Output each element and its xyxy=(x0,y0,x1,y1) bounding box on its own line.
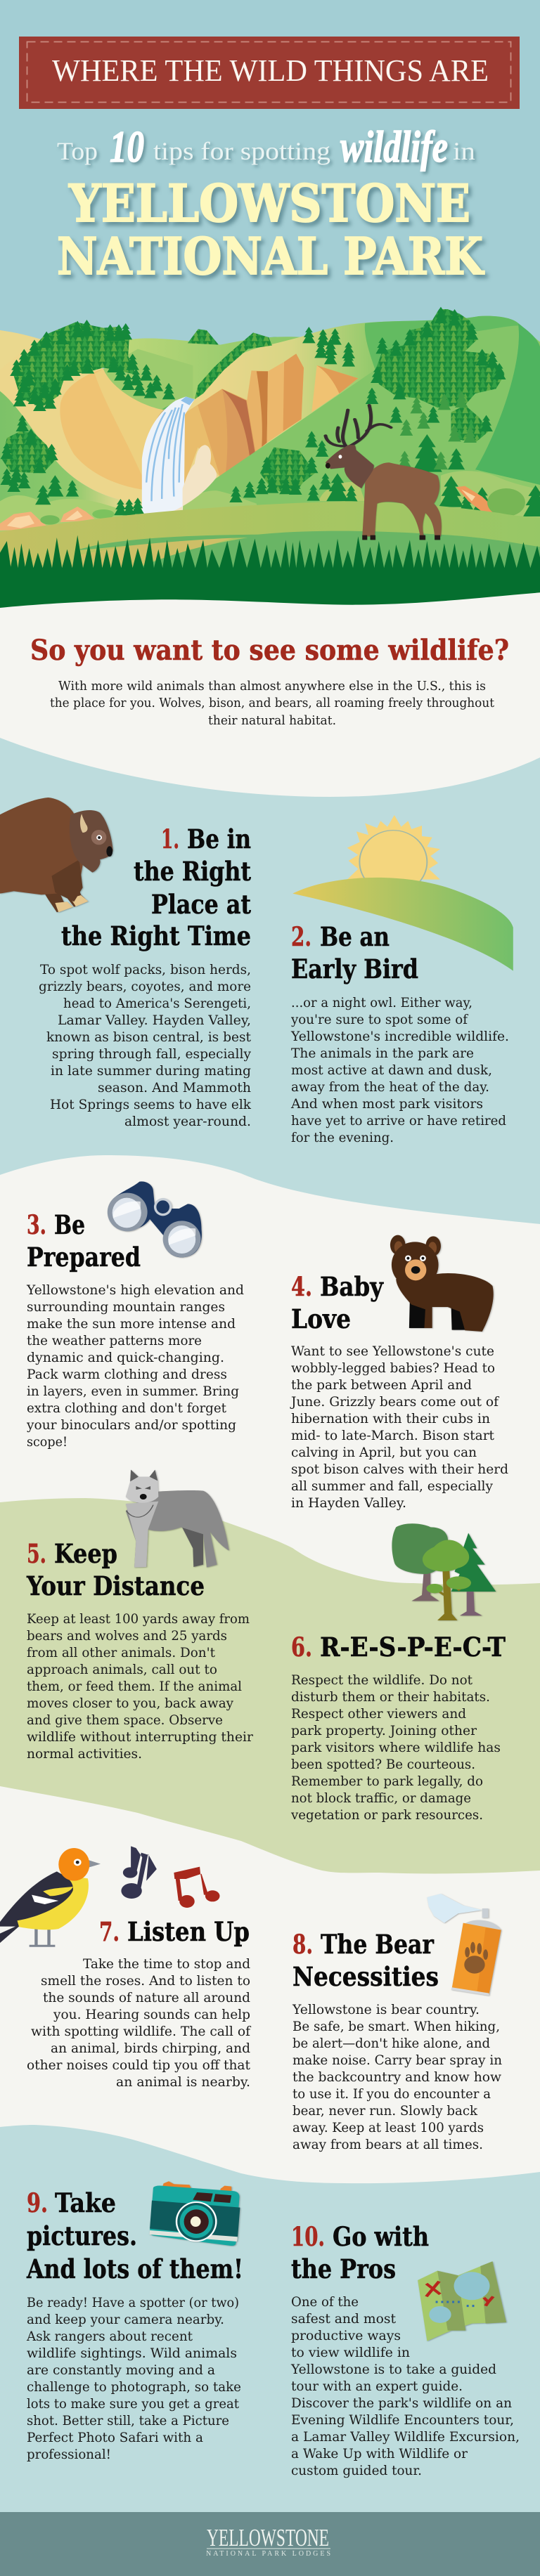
text: tip 1: To spot wolf packs, bison herds, xyxy=(40,962,251,977)
heading: tip 5: Your Distance xyxy=(26,1570,205,1601)
panel: tip 5 xyxy=(26,1470,254,1762)
text: tip 9: are constantly moving and a xyxy=(27,2362,215,2378)
text: tip 8: be alert—don't hike alone, and xyxy=(292,2036,490,2051)
text: tip 4: calving in April, but you can xyxy=(291,1445,477,1460)
heading: tip 8: Necessities xyxy=(292,1961,439,1992)
heading: tip 7: 7. xyxy=(99,1916,120,1947)
icon: bear spray xyxy=(427,1894,501,1996)
text: tip 10: a Lamar Valley Wildlife Excursion, xyxy=(291,2429,520,2445)
heading: tip 1: 1. xyxy=(161,824,179,854)
heading: tip 1: Place at xyxy=(151,889,251,920)
text: tip 3: extra clothing and don't forget xyxy=(27,1400,226,1416)
panel: tip 8 xyxy=(292,1894,502,2152)
text: tip 9: Be ready! Have a spotter (or two) xyxy=(27,2295,239,2310)
background: teal band tips 1-2 xyxy=(0,738,540,1224)
intro text: the place for you. Wolves, bison, and bears, all roaming freely throughout xyxy=(50,696,495,710)
panel: tip 3 xyxy=(26,1181,244,1450)
text: tip 10: to view wildlife in xyxy=(291,2345,410,2360)
text: tip 3: surrounding mountain ranges xyxy=(27,1299,225,1315)
heading: tip 4: 4. xyxy=(291,1271,312,1302)
heading: tip 9: pictures. xyxy=(27,2220,137,2251)
text: tip 10: Discover the park's wildlife on an xyxy=(291,2395,512,2411)
text: tip 1: in late summer during mating xyxy=(51,1063,251,1079)
icon: trees xyxy=(392,1523,496,1620)
text: tip 1: grizzly bears, coyotes, and more xyxy=(39,979,251,994)
text: tip 10: Yellowstone is to take a guided xyxy=(290,2362,496,2377)
icon: trail map xyxy=(418,2261,506,2341)
text: tip 7: with spotting wildlife. The call of xyxy=(31,2024,252,2039)
text: tip 3: scope! xyxy=(27,1434,68,1450)
ground xyxy=(0,501,540,576)
text: tip 2: for the evening. xyxy=(291,1130,394,1145)
text: tip 6: Remember to park legally, do xyxy=(291,1774,483,1789)
text: tip 5: moves closer to you, back away xyxy=(27,1696,233,1711)
heading: tip 2: Be an xyxy=(320,921,390,952)
icon: music notes xyxy=(121,1846,219,1908)
text: tip 7 xyxy=(27,1956,252,2090)
icon: wolf xyxy=(126,1470,229,1568)
text: tip 4: hibernation with their cubs in xyxy=(291,1411,490,1426)
text: tip 7: an animal is nearby. xyxy=(116,2074,250,2090)
subtitle: 10 xyxy=(110,122,144,171)
text: tip 3: in layers, even in summer. Bring xyxy=(27,1384,239,1399)
heading: tip 4: Baby xyxy=(320,1271,384,1302)
text: tip 7: smell the roses. And to listen to xyxy=(41,1973,250,1989)
footer xyxy=(0,2512,540,2576)
subtitle xyxy=(57,122,475,171)
text: tip 1: known as bison central, is best xyxy=(46,1029,251,1045)
text: tip 7: you. Hearing sounds can help xyxy=(53,2007,250,2022)
text: tip 5: them, or feed them. If the animal xyxy=(27,1679,242,1694)
text: tip 4: the park between April and xyxy=(291,1377,472,1393)
intro text: With more wild animals than almost anywhere else in the U.S., this is xyxy=(58,679,486,694)
panel: tip 2 xyxy=(290,815,513,1145)
forests xyxy=(0,307,540,516)
subtitle: tips for spotting xyxy=(153,137,330,165)
text: tip 9: Perfect Photo Safari with a xyxy=(27,2430,203,2445)
text: tip 2: most active at dawn and dusk, xyxy=(291,1062,492,1078)
text: tip 3 xyxy=(26,1282,244,1450)
text: tip 8: away. Keep at least 100 yards xyxy=(292,2120,484,2135)
text: tip 8: Yellowstone is bear country. xyxy=(292,2002,480,2017)
text: tip 7: Take the time to stop and xyxy=(83,1956,250,1972)
text: tip 5: bears and wolves and 25 yards xyxy=(27,1628,227,1644)
text: tip 5: Keep at least 100 yards away from xyxy=(27,1611,250,1627)
text: tip 10: productive ways xyxy=(291,2328,401,2343)
text: tip 2: Yellowstone's incredible wildlife. xyxy=(290,1029,509,1044)
icon: camera xyxy=(150,2181,240,2246)
heading: tip 10 xyxy=(291,2221,429,2284)
text: tip 7: the sounds of nature all around xyxy=(43,1990,250,2005)
text: tip 6: park visitors where wildlife has xyxy=(291,1740,501,1755)
heading: tip 3: 3. xyxy=(27,1209,46,1240)
text: tip 1 xyxy=(39,962,251,1129)
text: tip 10: a Wake Up with Wildlife or xyxy=(291,2446,468,2461)
text: tip 2: you're sure to spot some of xyxy=(290,1012,469,1027)
text: tip 8: bear, never run. Slowly back xyxy=(292,2103,477,2119)
text: tip 5: and give them space. Observe xyxy=(27,1712,223,1728)
heading: tip 9: And lots of them! xyxy=(26,2253,243,2284)
text: tip 8: to use it. If you do encounter a xyxy=(292,2086,491,2102)
text: tip 4: June. Grizzly bears come out of xyxy=(290,1394,500,1410)
heading: tip 4: Love xyxy=(291,1303,351,1334)
text: tip 8: make noise. Carry bear spray in xyxy=(292,2053,502,2068)
text: tip 6 xyxy=(290,1672,501,1823)
text: tip 3: dynamic and quick-changing. xyxy=(27,1350,224,1365)
footer logo: NATIONAL PARK LODGES xyxy=(206,2550,330,2558)
text: tip 9: and keep your camera nearby. xyxy=(27,2312,224,2327)
panel: tip 6 xyxy=(290,1523,506,1823)
icon: rising sun over hill xyxy=(292,815,513,971)
text: tip 9: wildlife sightings. Wild animals xyxy=(27,2346,237,2361)
background: teal band tips 9-10 xyxy=(0,2125,540,2516)
text: tip 4: in Hayden Valley. xyxy=(291,1495,406,1511)
text: tip 1: head to America's Serengeti, xyxy=(63,996,251,1011)
panel: tip 9 xyxy=(26,2181,243,2462)
heading: tip 2 xyxy=(291,921,418,984)
panel: tip 7 xyxy=(0,1846,252,2090)
heading: tip 3: Be xyxy=(54,1209,85,1240)
text: tip 9: Ask rangers about recent xyxy=(26,2329,193,2344)
text: tip 4: mid- to late-March. Bison start xyxy=(291,1428,494,1443)
footer logo: YELLOWSTONE xyxy=(207,2524,329,2551)
text: tip 9 xyxy=(26,2295,241,2462)
panel: tip 10 xyxy=(290,2221,520,2478)
text: tip 5: wildlife without interrupting their xyxy=(27,1729,254,1745)
text: tip 9: lots to make sure you get a great xyxy=(27,2396,239,2412)
heading: tip 5 xyxy=(26,1538,205,1601)
heading: tip 5: 5. xyxy=(27,1538,46,1569)
text: tip 2: The animals in the park are xyxy=(291,1046,474,1061)
illustration: Yellowstone landscape xyxy=(0,307,540,608)
heading: tip 1: Be in xyxy=(187,824,251,854)
text: tip 4: wobbly-legged babies? Head to xyxy=(291,1360,495,1376)
heading: tip 3 xyxy=(27,1209,141,1273)
text: tip 7: an animal, birds chirping, and xyxy=(51,2041,250,2056)
waterfall mist xyxy=(169,445,217,513)
text: tip 10: Evening Wildlife Encounters tour, xyxy=(291,2412,514,2428)
text: tip 2: ...or a night owl. Either way, xyxy=(291,995,472,1010)
text: tip 5: normal activities. xyxy=(27,1746,142,1762)
heading: tip 2: 2. xyxy=(291,921,311,952)
text: tip 10 xyxy=(290,2294,520,2478)
background: sage band tips 5-6 xyxy=(0,1498,540,1873)
heading: tip 6: 6. xyxy=(291,1632,312,1663)
heading: tip 1: the Right xyxy=(134,856,251,887)
heading: tip 4 xyxy=(291,1271,384,1334)
icon: western tanager bird xyxy=(0,1848,101,1946)
heading: tip 6: R-E-S-P-E-C-T xyxy=(320,1632,506,1663)
heading: tip 2: Early Bird xyxy=(291,954,418,984)
text: tip 6: disturb them or their habitats. xyxy=(291,1689,490,1705)
text: tip 3: Yellowstone's high elevation and xyxy=(26,1282,244,1298)
heading: tip 9: 9. xyxy=(27,2187,48,2218)
text: tip 3: Pack warm clothing and dress xyxy=(27,1367,227,1382)
icon: bison xyxy=(0,798,113,912)
text: tip 9: professional! xyxy=(27,2447,111,2462)
text: tip 5: approach animals, call out to xyxy=(27,1662,217,1677)
heading: tip 7: Listen Up xyxy=(127,1916,250,1947)
text: tip 10: One of the xyxy=(291,2294,359,2310)
heading: tip 8 xyxy=(292,1929,439,1992)
text: tip 1: season. And Mammoth xyxy=(98,1080,251,1095)
text: tip 6: not block traffic, or damage xyxy=(291,1790,471,1806)
heading: tip 1: the Right Time xyxy=(61,921,251,951)
elk xyxy=(326,405,442,540)
text: tip 6: been spotted? Be courteous. xyxy=(291,1757,475,1772)
subtitle: wildlife xyxy=(340,122,448,171)
text: tip 5: from all other animals. Don't xyxy=(27,1645,215,1660)
text: tip 8: Be safe, be smart. When hiking, xyxy=(292,2019,500,2034)
icon: binoculars xyxy=(108,1181,202,1257)
heading: tip 8: 8. xyxy=(292,1929,313,1960)
rocks and bushes xyxy=(0,486,525,531)
waterfall xyxy=(142,396,195,514)
title xyxy=(57,174,484,286)
intro text xyxy=(50,679,495,728)
text: tip 7: other noises could tip you off that xyxy=(27,2057,250,2073)
subtitle: in xyxy=(453,137,475,165)
heading: tip 5: Keep xyxy=(54,1538,117,1569)
title: NATIONAL PARK xyxy=(57,226,484,286)
grass xyxy=(0,535,540,608)
text: tip 2: And when most park visitors xyxy=(290,1096,483,1112)
heading: tip 9: Take xyxy=(55,2187,116,2218)
heading: tip 10: the Pros xyxy=(291,2253,396,2284)
text: tip 1: spring through fall, especially xyxy=(52,1046,251,1062)
intro text: their natural habitat. xyxy=(208,713,336,728)
text: tip 8: the backcountry and know how xyxy=(292,2069,502,2085)
background: sky xyxy=(0,0,540,562)
heading: tip 10: 10. xyxy=(291,2221,325,2252)
text: tip 6: Respect the wildlife. Do not xyxy=(291,1672,472,1688)
text: tip 10: safest and most xyxy=(291,2311,396,2327)
text: tip 1: almost year-round. xyxy=(124,1114,251,1129)
text: tip 9: shot. Better still, take a Picture xyxy=(27,2413,229,2428)
text: tip 3: the weather patterns more xyxy=(27,1333,202,1348)
icon: bear cub xyxy=(390,1235,494,1332)
text: tip 9: challenge to photograph, so take xyxy=(27,2379,241,2395)
text: tip 6: park property. Joining other xyxy=(291,1723,477,1738)
heading: tip 8: The Bear xyxy=(321,1929,434,1960)
text: tip 2 xyxy=(290,995,509,1145)
text: tip 1: Hot Springs seems to have elk xyxy=(50,1097,251,1112)
heading: tip 3: Prepared xyxy=(27,1242,141,1273)
panel: tip 4 xyxy=(290,1235,508,1511)
banner: WHERE THE WILD THINGS ARE xyxy=(52,53,489,88)
text: tip 8 xyxy=(292,2002,502,2152)
text: tip 3: make the sun more intense and xyxy=(27,1316,236,1332)
text: tip 2: away from the heat of the day. xyxy=(291,1079,489,1095)
footer logo xyxy=(206,2524,330,2558)
text: tip 4: all summer and fall, especially xyxy=(291,1478,493,1494)
text: tip 4: spot bison calves with their herd xyxy=(291,1462,508,1477)
subtitle: Top xyxy=(57,137,98,165)
text: tip 10: tour with an expert guide. xyxy=(291,2379,463,2394)
text: tip 5 xyxy=(27,1611,254,1762)
heading: tip 9 xyxy=(26,2187,243,2284)
text: tip 4 xyxy=(290,1344,508,1511)
banner xyxy=(19,37,520,109)
text: tip 1: Lamar Valley. Hayden Valley, xyxy=(58,1013,251,1028)
panel: tip 1 xyxy=(0,798,251,1129)
heading: tip 1 xyxy=(61,824,251,951)
text: tip 10: custom guided tour. xyxy=(291,2463,422,2478)
text: tip 2: have yet to arrive or have retired xyxy=(291,1113,506,1128)
text: tip 8: away from bears at all times. xyxy=(292,2137,483,2152)
text: tip 6: vegetation or park resources. xyxy=(290,1807,483,1823)
title: YELLOWSTONE xyxy=(68,174,470,234)
text: tip 4: Want to see Yellowstone's cute xyxy=(291,1344,494,1359)
text: tip 3: your binoculars and/or spotting xyxy=(26,1417,236,1433)
heading: tip 10: Go with xyxy=(333,2221,429,2252)
text: tip 6: Respect other viewers and xyxy=(291,1706,466,1722)
